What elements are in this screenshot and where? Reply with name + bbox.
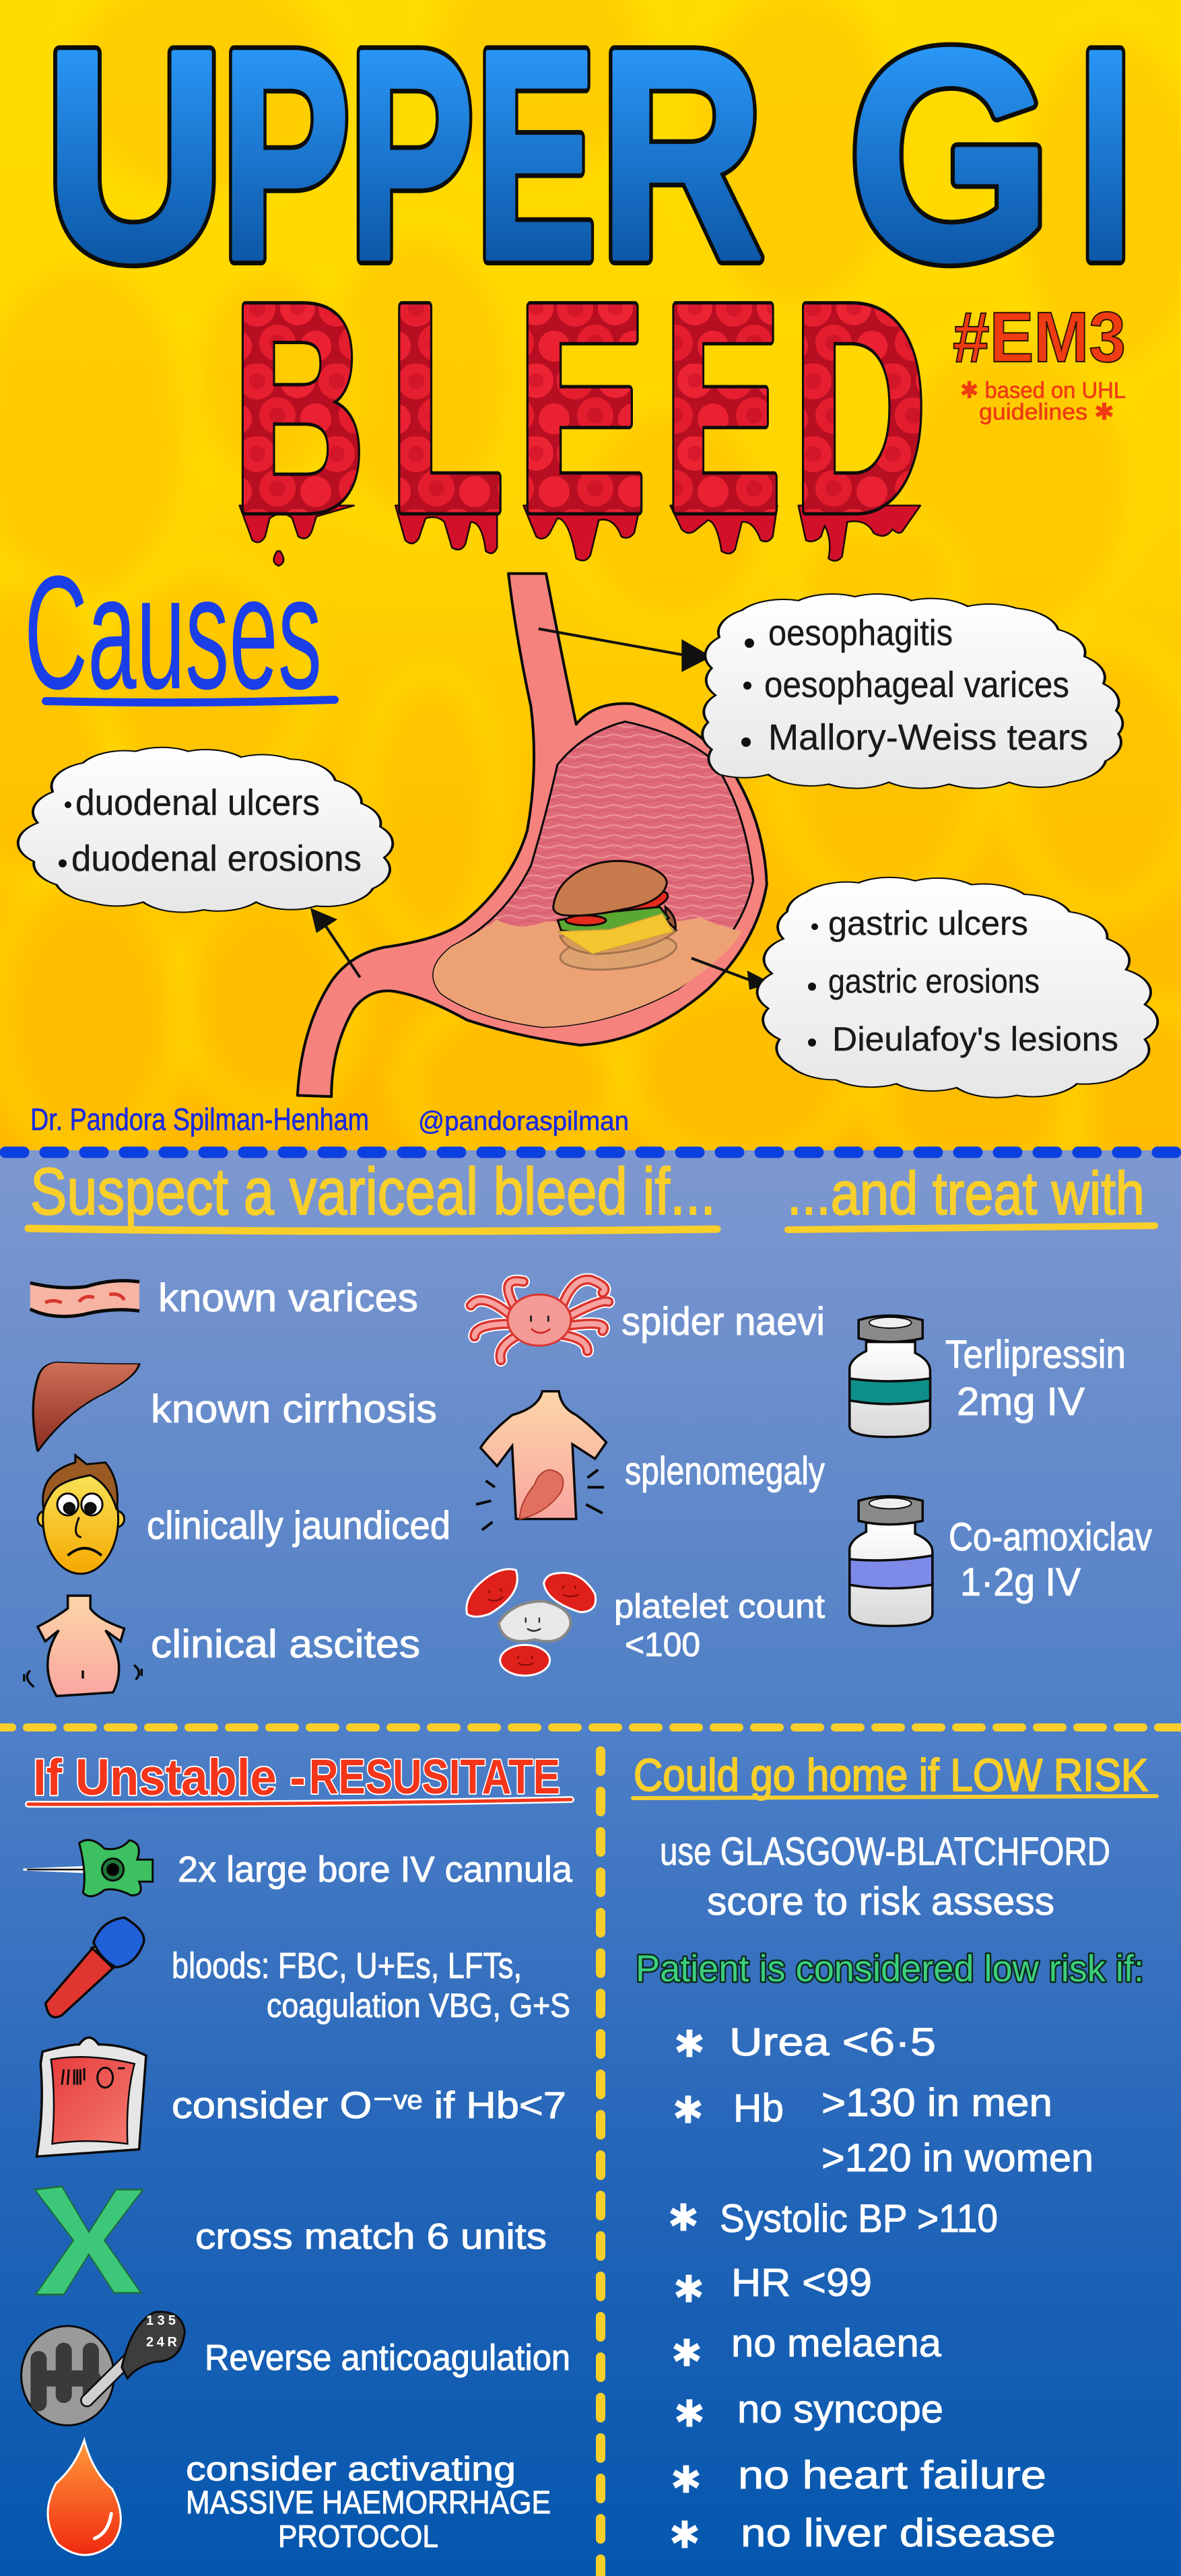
list: low risk criteria: no melaena (731, 2321, 942, 2365)
callout: oesophageal causes: oesophageal varices (764, 665, 1069, 705)
item: reverse anticoagulation (22, 2312, 570, 2425)
subheading: low risk criteria: Patient is considered low risk if: (636, 1947, 1144, 1989)
callout: gastric causes: gastric erosions (828, 962, 1040, 1000)
item: consider O neg (37, 2038, 566, 2156)
heading: if unstable resuscitate (28, 1749, 571, 1806)
icon: green X (35, 2186, 143, 2294)
icon: varices (30, 1281, 139, 1317)
list: low risk criteria: Hb (733, 2086, 784, 2130)
item: Co-amoxiclav: 1·2g IV (960, 1560, 1081, 1604)
callout: oesophageal causes: Mallory-Weiss tears (768, 717, 1088, 758)
list: low risk criteria: ✱ (673, 2089, 704, 2132)
item: clinically jaundiced: clinically jaundiced (147, 1504, 450, 1548)
stomach lumen rugae (434, 721, 753, 1027)
item: clinical ascites: clinical ascites (151, 1622, 420, 1666)
item: massive haemorrhage protocol: consider activating (186, 2450, 516, 2488)
divider: blue dashes (5, 1146, 1181, 1158)
title: BLEED: E (664, 242, 781, 572)
icon: vial purple (850, 1496, 933, 1626)
item: reverse anticoagulation: Reverse anticoagulation (205, 2338, 570, 2378)
item: spider naevi (471, 1280, 825, 1360)
credit: handle: @pandoraspilman (418, 1107, 629, 1136)
hashtag #EM3: #EM3 (953, 298, 1126, 377)
icon: blood bag (37, 2038, 146, 2156)
list: low risk criteria: >120 in women (821, 2136, 1093, 2180)
divider: yellow dashes vertical (596, 1751, 605, 2576)
item: massive haemorrhage protocol (48, 2440, 551, 2555)
list: low risk criteria: >130 in men (821, 2081, 1052, 2125)
item: bloods: bloods: FBC, U+Es, LFTs, (172, 1946, 522, 1986)
item: known cirrhosis: known cirrhosis (151, 1387, 437, 1431)
title: BLEED: B (233, 242, 365, 572)
callout: duodenal causes (18, 748, 393, 913)
list: low risk criteria: no heart failure (738, 2453, 1046, 2497)
panel: lower background (0, 1721, 1181, 2576)
title: BLEED: D (793, 242, 926, 572)
icon: blood drop (48, 2440, 121, 2555)
icon: torso with spleen (476, 1391, 606, 1530)
title: BLEED: L (389, 242, 504, 572)
text: Glasgow-Blatchford: score to risk assess (707, 1880, 1054, 1923)
icon: spider (471, 1280, 609, 1360)
item: platelet count: platelet count (614, 1587, 825, 1625)
item: clinical ascites (24, 1595, 420, 1696)
arrow to oesophageal causes (539, 629, 712, 672)
item: spider naevi: spider naevi (621, 1300, 825, 1344)
credit: author name: Dr. Pandora Spilman-Henham (30, 1102, 369, 1137)
divider: yellow dashes horizontal (0, 1723, 1181, 1731)
icon: blood tube (46, 1917, 144, 2017)
list: low risk criteria: ✱ (673, 2268, 704, 2311)
title: BLEED: D (793, 242, 926, 572)
icon: gear stick: 2 4 R (146, 2335, 178, 2350)
item: Terlipressin (850, 1315, 1126, 1437)
list: low risk criteria: ✱ (668, 2197, 699, 2240)
item: known cirrhosis (33, 1362, 437, 1451)
gastric contents (434, 917, 742, 1027)
item: Co-amoxiclav: Co-amoxiclav (949, 1515, 1152, 1559)
item: splenomegaly: splenomegaly (625, 1449, 825, 1493)
item: known varices (30, 1276, 418, 1320)
heading: if unstable resuscitate: If Unstable - (33, 1749, 306, 1806)
title: BLEED: E (517, 242, 646, 572)
list: low risk criteria: ✱ (671, 2458, 702, 2503)
item: platelet count: <100 (625, 1626, 700, 1663)
heading: Causes (24, 542, 335, 723)
list: low risk criteria: ✱ (674, 2392, 705, 2437)
note: based on UHL guidelines: ✱ based on UHL (960, 378, 1126, 403)
callout: gastric causes: gastric ulcers (828, 904, 1028, 942)
item: cannula: 2x large bore IV cannula (178, 1849, 573, 1890)
icon: blood cells and platelet (467, 1569, 596, 1676)
blood drips (240, 506, 920, 566)
item: clinically jaundiced (38, 1455, 450, 1574)
callout: gastric causes: Dieulafoy's lesions (832, 1020, 1118, 1058)
title: UPPER GI (44, 0, 1134, 321)
title: BLEED (233, 242, 926, 572)
icon: ascites torso (24, 1595, 141, 1696)
callout: oesophageal causes: oesophagitis (768, 613, 953, 653)
text: Glasgow-Blatchford (660, 1830, 1110, 1923)
panel: variceal background (0, 1150, 1181, 1726)
icon: liver (33, 1362, 139, 1451)
item: bloods: coagulation VBG, G+S (267, 1987, 570, 2024)
item: platelet count (467, 1569, 825, 1676)
arrow to gastric causes (691, 958, 772, 990)
icon: gear stick: 1 3 5 (146, 2313, 176, 2328)
item: massive haemorrhage protocol: PROTOCOL (278, 2519, 438, 2554)
icon: vial teal (850, 1315, 930, 1437)
title: BLEED: E (664, 242, 781, 572)
item: bloods (46, 1917, 570, 2024)
callout: duodenal causes: duodenal erosions (71, 838, 362, 879)
item: consider O neg: consider O⁻ᵛᵉ if Hb<7 (172, 2084, 566, 2126)
list: low risk criteria: Urea <6·5 (729, 2020, 936, 2064)
stomach wall (298, 574, 767, 1096)
panel: yellow cell background (0, 0, 1181, 1206)
list: low risk criteria: HR <99 (731, 2261, 872, 2305)
item: massive haemorrhage protocol: MASSIVE HAEMORRHAGE (186, 2485, 551, 2521)
item: Terlipressin: Terlipressin (945, 1333, 1126, 1377)
callout: duodenal causes: duodenal ulcers (75, 783, 320, 823)
arrow to duodenal causes (310, 908, 360, 977)
list: low risk criteria: Systolic BP >110 (720, 2197, 998, 2241)
title: BLEED: B (233, 242, 365, 572)
list: low risk criteria (668, 2020, 1093, 2558)
item: splenomegaly (476, 1391, 825, 1530)
list: low risk criteria: ✱ (669, 2513, 700, 2558)
heading: if unstable resuscitate: RESUSITATE (309, 1750, 560, 1804)
heading: suspect a variceal bleed: Suspect a variceal bleed if... (30, 1154, 716, 1228)
burger (553, 861, 678, 975)
icon: cannula (23, 1840, 153, 1896)
note: based on UHL guidelines (960, 378, 1126, 425)
list: low risk criteria: ✱ (671, 2332, 702, 2376)
item: cross match: cross match 6 units (195, 2216, 547, 2257)
title: BLEED: E (517, 242, 646, 572)
callout: gastric causes (757, 878, 1157, 1098)
item: Terlipressin: 2mg IV (957, 1380, 1085, 1424)
icon: jaundiced face (38, 1455, 125, 1574)
list: low risk criteria: no liver disease (741, 2511, 1056, 2555)
item: known varices: known varices (158, 1276, 418, 1320)
stomach illustration (298, 574, 767, 1096)
list: low risk criteria: no syncope (737, 2387, 943, 2431)
note: based on UHL guidelines: guidelines ✱ (979, 399, 1114, 425)
item: cross match (35, 2186, 547, 2294)
item: cannula (23, 1840, 573, 1896)
callout: oesophageal causes (702, 594, 1122, 789)
icon: gear stick (22, 2312, 184, 2425)
item: Co-amoxiclav (850, 1496, 1152, 1626)
list: low risk criteria: ✱ (674, 2023, 705, 2066)
title: BLEED: L (389, 242, 504, 572)
heading: Causes: Causes (24, 542, 322, 723)
